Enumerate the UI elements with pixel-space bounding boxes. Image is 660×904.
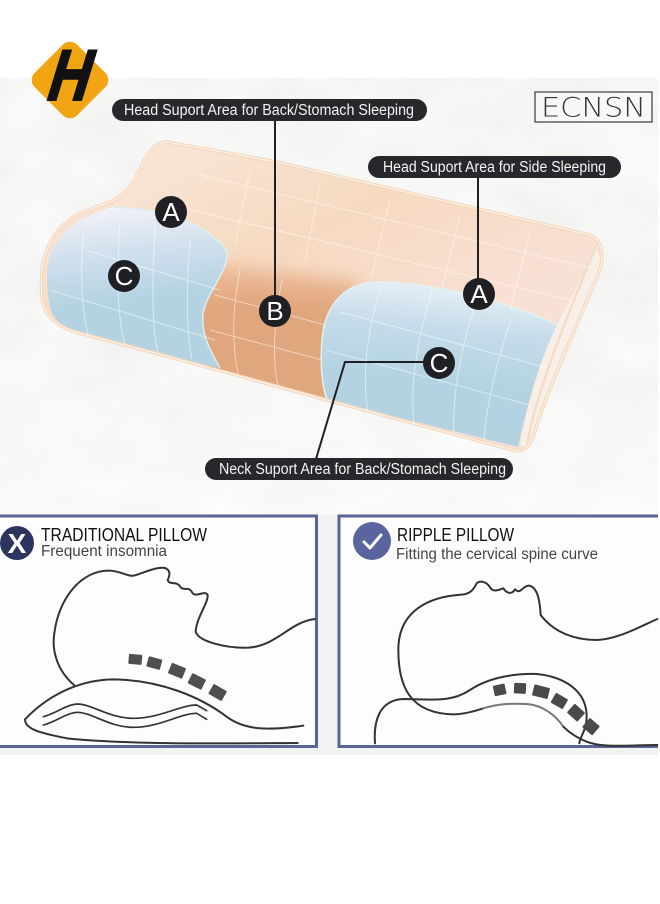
icon: X badge: X [8, 528, 27, 559]
marker B [259, 295, 291, 327]
zone C left: edge highlight [113, 207, 227, 368]
heading: traditional pillow: TRADITIONAL PILLOW [41, 524, 207, 545]
pillow outline [41, 142, 602, 451]
pillow side panel [520, 247, 601, 448]
icon: check badge [353, 522, 391, 560]
callout: head support side: Head Suport Area for Side Sleeping [383, 159, 606, 176]
panel: traditional pillow [0, 516, 316, 746]
diagram: head on ripple pillow [375, 582, 657, 746]
infographic canvas [0, 42, 658, 755]
diagram: head on traditional pillow [25, 568, 315, 743]
zone C: left neck area [47, 207, 227, 368]
marker C right [423, 347, 455, 379]
spine vertebrae [493, 683, 600, 736]
marker C left: C [115, 261, 133, 291]
subheading: fitting the cervical spine curve: Fitting the cervical spine curve [396, 546, 598, 563]
pillow side piping [527, 247, 596, 445]
icon: X badge [0, 526, 34, 560]
pillow seam highlight [41, 142, 602, 451]
callout: head support back/stomach: Head Suport Area for Back/Stomach Sleeping [124, 102, 414, 119]
quilting grid lines [50, 170, 590, 440]
panel: ripple pillow [339, 514, 660, 750]
zone B: centre neck area [202, 258, 365, 398]
zone C right: edge highlight [321, 282, 557, 400]
corner logo: orange diamond: H [39, 36, 105, 116]
zone C: right neck area [321, 282, 557, 447]
marker C right: C [430, 348, 448, 378]
marker A left: A [162, 197, 180, 227]
marker A right [463, 278, 495, 310]
marker A left [155, 196, 187, 228]
marker B: B [266, 296, 284, 326]
brand logo: ECNSN: ECNSN [541, 92, 646, 124]
heading: ripple pillow: RIPPLE PILLOW [397, 524, 514, 545]
marker A right: A [470, 279, 488, 309]
marble background [0, 78, 658, 755]
subheading: frequent insomnia: Frequent insomnia [41, 543, 167, 560]
marker C left [108, 260, 140, 292]
panel: pillow illustration [41, 142, 602, 451]
callout: neck support: Neck Suport Area for Back/Stomach Sleeping [219, 461, 506, 478]
leader lines [275, 120, 478, 459]
spine vertebrae [128, 654, 227, 701]
pillow body [41, 142, 602, 451]
